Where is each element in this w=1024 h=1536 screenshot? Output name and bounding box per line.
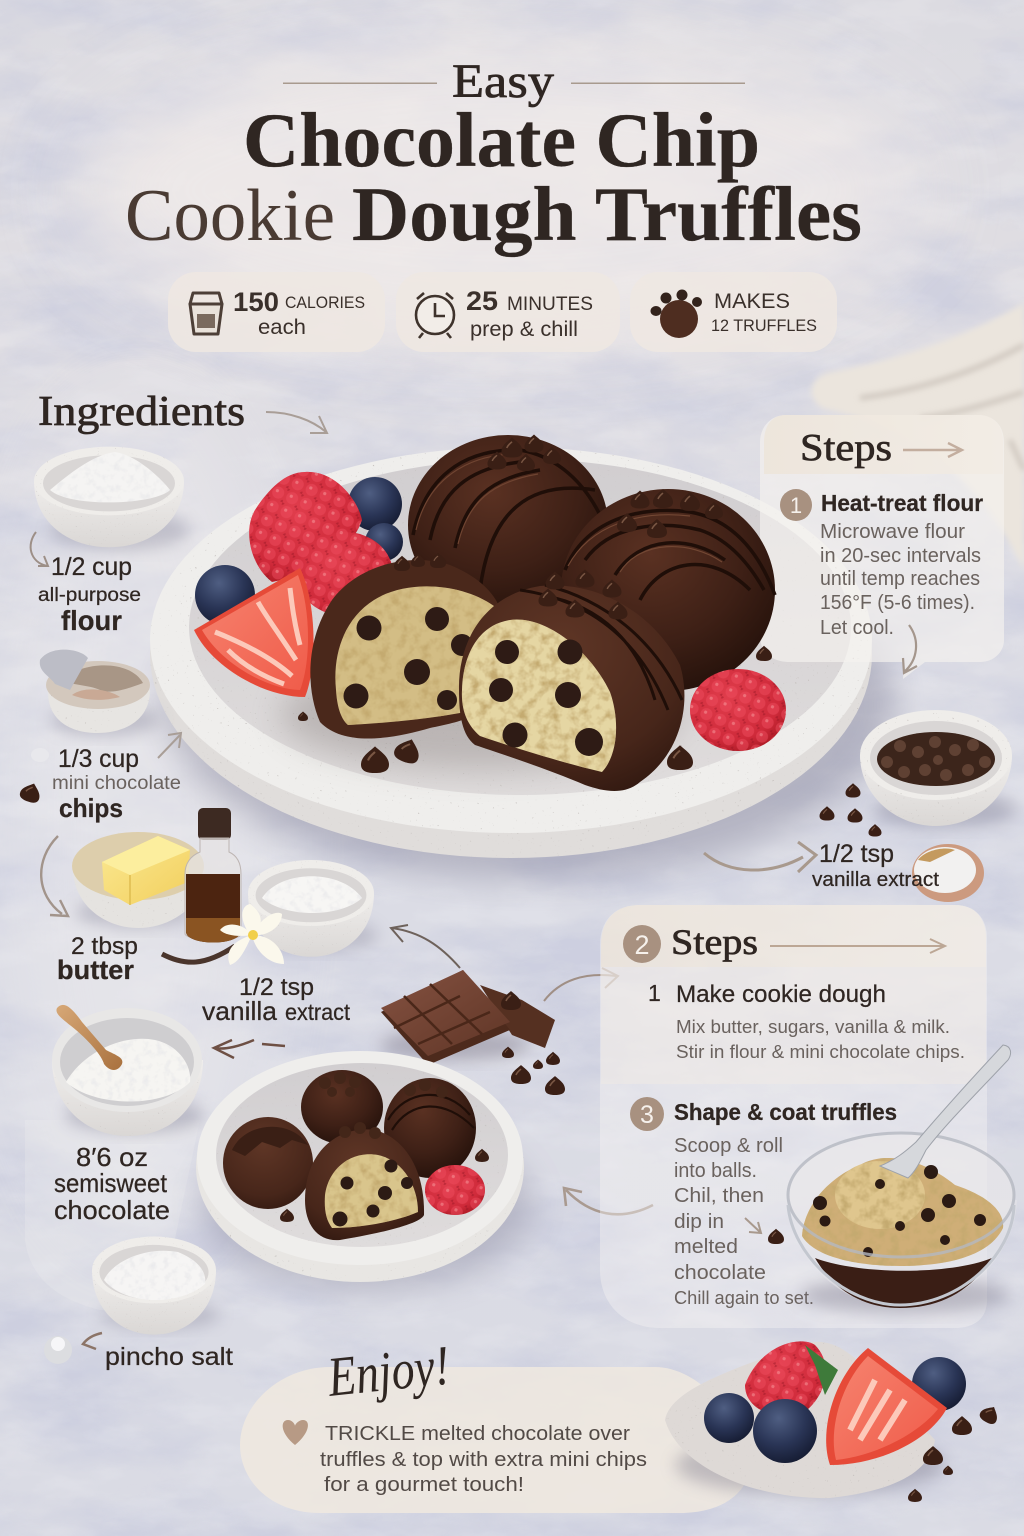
label: flour: 1/2 cup xyxy=(51,553,132,581)
steps panel two: into balls. xyxy=(674,1160,757,1182)
step number 3: 3 xyxy=(640,1101,654,1129)
ingredient: salt bowl xyxy=(92,1237,220,1335)
title xyxy=(125,55,862,257)
steps panel two: Shape & coat truffles xyxy=(674,1099,897,1125)
linen towel xyxy=(812,303,1024,570)
label: mini chocolate chips xyxy=(18,733,181,823)
stat pill: time xyxy=(396,272,620,352)
stat pill: calories xyxy=(168,272,385,352)
arrow xyxy=(266,412,327,433)
label: mini chocolate chips: 1/3 cup xyxy=(58,745,139,773)
label: vanilla extract with salt dish: vanilla extract xyxy=(812,869,939,891)
steps panel two: chocolate xyxy=(674,1262,766,1284)
stat pill: yield: MAKES xyxy=(714,290,790,313)
label: flour: all-purpose xyxy=(38,584,141,606)
steps panel two: melted xyxy=(674,1236,738,1258)
ingredient: sugar bowl with spoon xyxy=(40,650,160,736)
step number 3 xyxy=(630,1097,664,1131)
steps panel two: Chill again to set. xyxy=(674,1287,814,1308)
arrows around chocolate xyxy=(214,925,653,1214)
label: butter xyxy=(57,933,138,985)
arrow xyxy=(158,733,181,758)
ingredient: vanilla bottle xyxy=(185,808,241,942)
label: butter: butter xyxy=(57,955,134,985)
label: vanilla extract: 1/2 tsp xyxy=(239,974,314,1001)
label: vanilla extract with salt dish xyxy=(704,840,984,902)
truffles and berries on main plate xyxy=(194,434,786,791)
step number 2 xyxy=(623,925,661,963)
arrow and chip xyxy=(745,1218,784,1244)
label: vanilla extract with salt dish: 1/2 tsp xyxy=(819,840,894,868)
heading: ingredients xyxy=(38,389,327,435)
heading: ingredients: Ingredients xyxy=(38,389,245,435)
cut truffle: right xyxy=(459,569,684,791)
stat pill: calories: each xyxy=(258,316,306,339)
step number: 1 xyxy=(790,493,802,518)
enjoy panel: truffles & top with extra mini chips xyxy=(320,1448,647,1471)
steps panel two: Make cookie dough xyxy=(676,981,886,1008)
back truffle xyxy=(408,434,608,615)
arrow xyxy=(903,443,962,457)
faint translucent panel xyxy=(25,1120,200,1310)
stat pill: time: prep & chill xyxy=(470,318,578,341)
title: Dough Truffles xyxy=(352,171,862,257)
title: Easy xyxy=(452,55,554,108)
label: semisweet chocolate: chocolate xyxy=(54,1195,170,1225)
icon: alarm clock xyxy=(416,293,454,338)
arrow xyxy=(31,532,48,566)
icon: heart xyxy=(283,1420,308,1445)
steps panel two: 1 xyxy=(648,980,661,1006)
step number xyxy=(780,489,812,521)
cut truffle: left xyxy=(310,553,500,739)
title: Cookie xyxy=(125,175,335,257)
small truffles xyxy=(223,1070,476,1240)
enjoy panel: for a gourmet touch! xyxy=(324,1473,524,1496)
steps panel two: dip in xyxy=(674,1211,724,1233)
label: semisweet chocolate xyxy=(54,1142,170,1225)
label: semisweet chocolate: semisweet xyxy=(54,1168,168,1198)
steps panel two: Steps xyxy=(671,922,758,962)
enjoy panel: Enjoy! xyxy=(324,1335,453,1409)
stat pill: yield xyxy=(630,272,837,352)
stat pill: calories: CALORIES xyxy=(285,293,365,312)
ingredient: flour bowl with wooden spoon xyxy=(52,1005,205,1136)
steps panel one: until temp reaches xyxy=(820,568,980,590)
ingredient: flour bowl xyxy=(34,447,190,550)
steps panel two: Mix butter, sugars, vanilla & milk. xyxy=(676,1016,950,1037)
label: mini chocolate chips: chips xyxy=(59,793,123,823)
steps panel one: Let cool. xyxy=(820,617,894,639)
steps panel two: Stir in flour & mini chocolate chips. xyxy=(676,1041,965,1062)
small plate with truffles xyxy=(196,1051,533,1290)
stat pill: calories: 150 xyxy=(233,287,279,317)
arrow xyxy=(770,939,945,953)
arrow xyxy=(903,625,917,673)
steps panel one xyxy=(760,415,1004,679)
berry dish xyxy=(665,1341,1002,1502)
enjoy panel: TRICKLE melted chocolate over xyxy=(325,1422,630,1445)
stat pill: time: 25 xyxy=(466,286,498,316)
steps panel one: in 20-sec intervals xyxy=(820,545,981,567)
enjoy panel xyxy=(240,1335,750,1513)
label: salt xyxy=(44,1333,233,1371)
label: salt: pincho salt xyxy=(105,1343,233,1371)
raspberry right xyxy=(690,669,786,751)
steps panel one: Heat-treat flour xyxy=(821,490,983,516)
step number 2: 2 xyxy=(634,930,650,960)
steps panel one: 156°F (5-6 times). xyxy=(820,592,975,614)
arrow xyxy=(41,836,68,916)
label: mini chocolate chips: mini chocolate xyxy=(52,773,181,794)
title: Chocolate Chip xyxy=(243,97,760,183)
label: vanilla extract: vanilla xyxy=(202,996,278,1026)
ingredient: chocolate chips bowl xyxy=(820,710,1017,836)
icon: truffle with chips xyxy=(650,290,702,338)
steps panel one: Steps xyxy=(800,427,892,469)
main plate dish xyxy=(150,447,895,880)
stat pill: time: MINUTES xyxy=(507,294,593,315)
berries on main plate xyxy=(194,472,403,697)
ingredient: butter bowl xyxy=(72,832,205,928)
berries xyxy=(704,1341,966,1465)
steps panel two: Chil, then xyxy=(674,1185,764,1207)
icon: cup xyxy=(190,293,222,334)
label: flour: flour xyxy=(61,605,122,636)
label: vanilla extract: extract xyxy=(285,999,351,1025)
right truffle xyxy=(561,489,775,691)
label: semisweet chocolate: 8′6 oz xyxy=(76,1142,148,1172)
glass bowl of cookie dough with spoon xyxy=(788,1045,1017,1313)
vanilla flower and bean xyxy=(162,904,284,965)
loose chips on plate xyxy=(298,646,772,773)
label: butter: 2 tbsp xyxy=(71,933,138,960)
steps panel two xyxy=(600,905,987,1328)
steps panel two: Scoop & roll xyxy=(674,1135,783,1157)
strawberry half xyxy=(194,568,314,697)
label: flour xyxy=(38,553,141,636)
ingredient: coconut sugar bowl xyxy=(248,860,378,957)
ingredient: chocolate chunk bar xyxy=(380,970,565,1095)
stat pill: yield: 12 TRUFFLES xyxy=(711,316,817,335)
steps panel one: Microwave flour xyxy=(820,521,965,543)
label: vanilla extract xyxy=(202,974,351,1026)
